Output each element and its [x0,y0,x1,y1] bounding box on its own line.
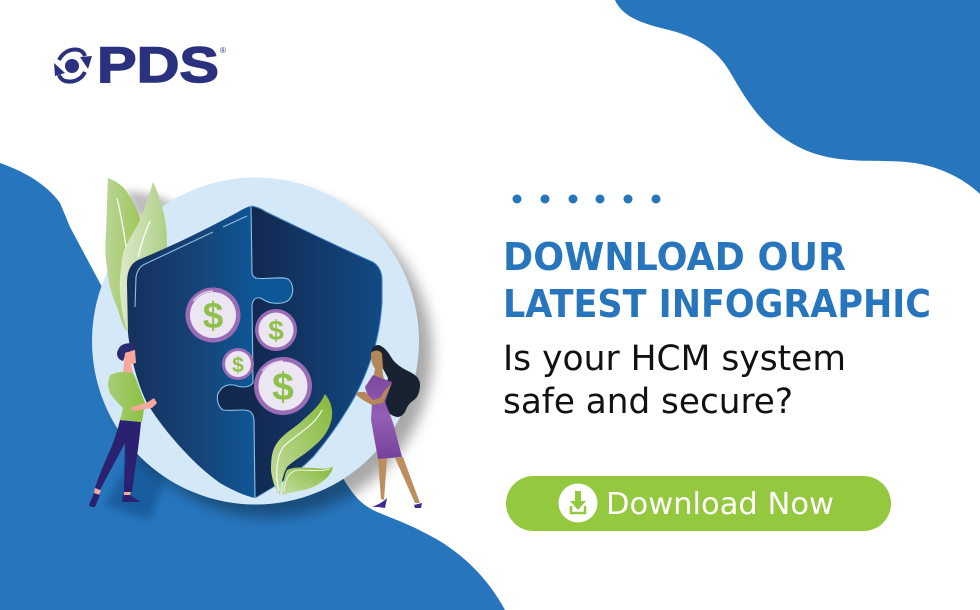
button label: Download Now [606,487,834,522]
man shadow [105,440,165,520]
hair [117,343,135,361]
top right blue blob [615,0,980,194]
woman [356,345,422,508]
bottom left blue blob [0,163,505,610]
legs [378,457,420,503]
ankles [94,488,131,496]
icon: front leaves [271,394,333,495]
neck and face [123,350,136,373]
torso [108,372,145,422]
dots row [512,194,660,204]
PDS logo [54,37,226,93]
heading: LATEST INFOGRAPHIC [503,282,931,326]
coin 2: $ [268,315,284,346]
icon: download [558,484,598,522]
subheading: safe and secure? [503,382,793,422]
registered mark: ® [220,46,226,55]
circle shadow [106,191,432,517]
legs [95,420,141,492]
logo eye icon [54,49,92,82]
shoes [89,493,141,507]
hair [372,345,420,417]
shield highlight lines [135,216,247,307]
coins [186,288,312,415]
arm [130,398,157,411]
shield outline right [251,206,382,498]
lower puzzle tab [217,383,258,420]
puzzle seam [217,206,293,498]
shoes [372,498,422,508]
shield [127,206,382,498]
face and neck [371,350,384,379]
leaf shadow [125,190,180,230]
shield right half [250,206,382,498]
download button [506,476,891,531]
icon: back leaves [105,178,167,333]
subheading: Is your HCM system [503,339,846,379]
subheading [503,339,846,422]
background circle [92,178,419,504]
illustration [89,178,432,520]
coin 3: $ [232,354,244,377]
heading: DOWNLOAD OUR [503,235,846,279]
heading [503,235,931,326]
coin 4: $ [272,366,294,409]
arm [356,383,392,405]
man [89,343,157,507]
shield left half [127,206,293,498]
logo wordmark: PDS [97,37,219,93]
dress [365,375,402,459]
coin 1: $ [203,295,224,336]
